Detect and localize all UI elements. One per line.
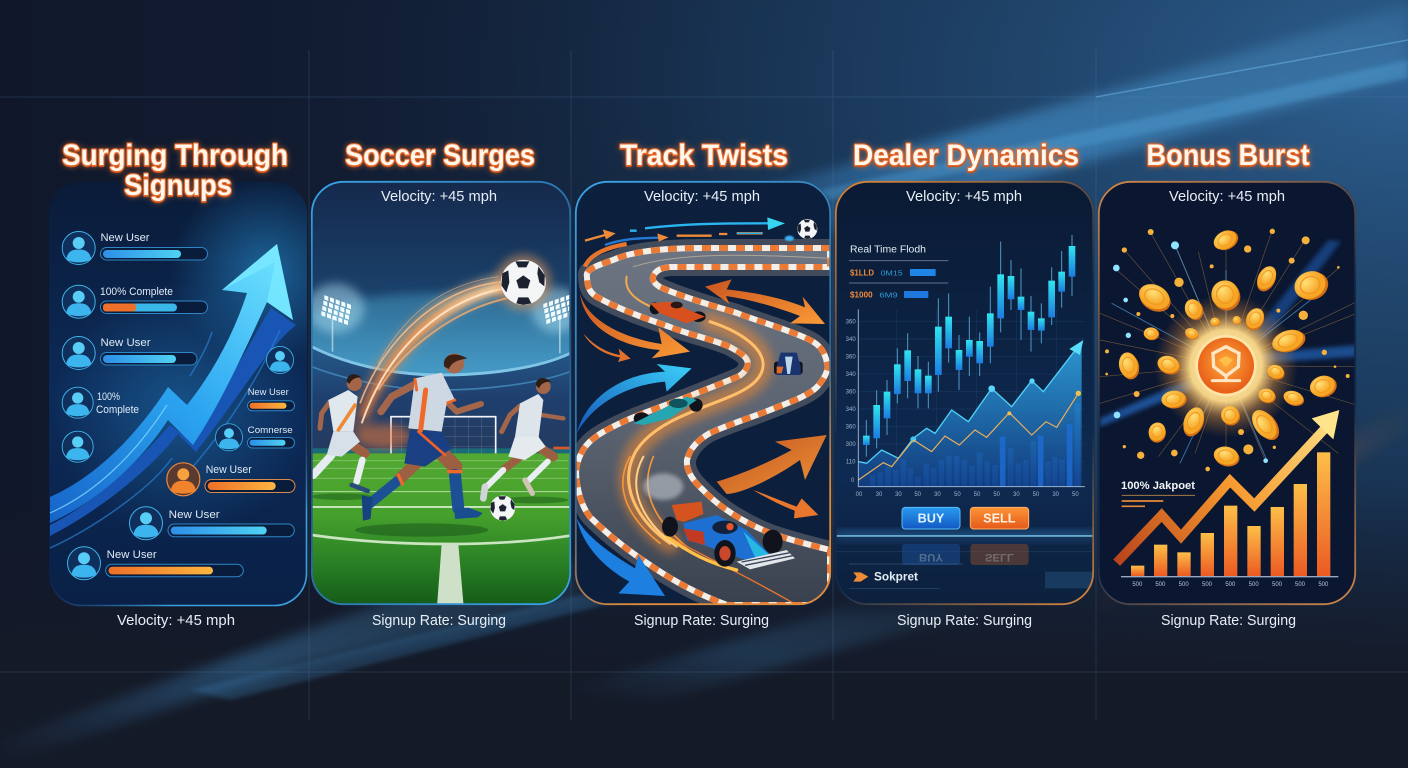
caption: signup rate 5: Signup Rate: Surging: [1161, 613, 1296, 629]
axes: 50: [1072, 492, 1079, 498]
info box: 6M9: [879, 290, 898, 299]
orange double arrow: [705, 279, 825, 324]
caption: velocity 4: Velocity: +45 mph: [906, 189, 1022, 205]
user row: right New User: New User: [248, 387, 289, 398]
user row: blue New User: [130, 507, 294, 540]
burst glow: [1154, 294, 1298, 437]
buy button: BUY: [918, 511, 945, 525]
orange low arrow: [753, 490, 818, 518]
orange right arrow: [717, 435, 827, 494]
user row: New User: [62, 232, 208, 264]
info box: [849, 245, 948, 299]
soccer ball large: [496, 255, 551, 310]
axes: 360: [846, 320, 856, 326]
reflected buttons: SELL: [985, 551, 1014, 563]
candlesticks: [863, 235, 1075, 457]
axes: 300: [846, 442, 856, 448]
user row: New User 2: [62, 336, 197, 370]
info box: $1000: [850, 289, 873, 299]
sell button: SELL: [983, 511, 1016, 525]
small orange arrow: [583, 333, 631, 362]
title: Track Twists: Track Twists: [620, 139, 788, 172]
user row: orange bar New User: New User: [107, 549, 157, 561]
chart grid: [858, 310, 1085, 462]
info box: Real Time Flodh: [850, 245, 926, 256]
reflected buttons: BUY: [919, 551, 943, 563]
soccer ball small: [490, 495, 515, 521]
floodlight right: [532, 287, 582, 353]
axes: 360: [846, 390, 856, 396]
ball trail: [355, 277, 507, 449]
axes: 50: [1033, 492, 1040, 498]
axes: 340: [846, 372, 856, 378]
axes: 110: [846, 460, 856, 466]
reflected buttons: [902, 544, 1029, 565]
axes: 360: [846, 355, 856, 361]
player left: [313, 374, 368, 491]
bars overlay: [1003, 424, 1070, 487]
panel: dealer: [835, 181, 1095, 607]
center emblem: [1195, 335, 1257, 396]
caption: velocity 5: Velocity: +45 mph: [1169, 189, 1285, 205]
bar chart: 500: [1179, 582, 1189, 588]
buy button: [902, 507, 960, 529]
pitch: [312, 453, 570, 607]
user row: orange New User: New User: [206, 464, 252, 476]
user row: orange bar New User: [68, 547, 243, 580]
jackpot label: 100% Jakpoet: [1121, 480, 1195, 492]
arrows flow: [585, 217, 785, 267]
caption: velocity 2: Velocity: +45 mph: [381, 189, 497, 205]
coins: [1117, 226, 1340, 468]
player right: [483, 378, 563, 498]
axes: 00: [856, 492, 863, 498]
user row: blue New User: New User: [169, 509, 220, 521]
blue low arrow: [577, 518, 665, 596]
surge arrow: [50, 244, 296, 548]
title: Soccer Surges: Soccer Surges: [345, 139, 535, 172]
sell button: [970, 507, 1029, 529]
small soccer ball: [785, 219, 817, 241]
sparks: [1105, 229, 1350, 471]
bar chart: 500: [1132, 582, 1143, 588]
player center: [362, 353, 482, 520]
car mid right: [774, 353, 803, 375]
user avatar: [62, 431, 93, 462]
jackpot label: [1121, 480, 1195, 506]
title: Surging Through Signups: Surging Through: [62, 139, 288, 172]
area chart: [858, 340, 1083, 487]
caption: signup rate 3: Signup Rate: Surging: [634, 613, 769, 629]
car mid: [633, 397, 703, 425]
title: Surging Through Signups: [62, 139, 288, 202]
panel: track: [575, 181, 831, 605]
panel: signups: [49, 182, 308, 606]
blue sparks: [1113, 241, 1268, 463]
car top: [650, 302, 706, 323]
title: Surging Through Signups: Signups: [124, 169, 232, 202]
sokpret row: Sokpret: [874, 570, 918, 584]
growth arrow: [1117, 410, 1339, 563]
volume bars: [873, 403, 1077, 487]
caption: velocity 1: Velocity: +45 mph: [117, 613, 235, 629]
bar chart: 500: [1225, 582, 1236, 588]
user row: New User: New User: [100, 232, 150, 244]
car large: [662, 502, 795, 569]
axes: 50: [974, 492, 981, 498]
axes: 360: [846, 424, 856, 430]
race track: [576, 248, 830, 605]
axes: 50: [993, 492, 1001, 498]
goal: [391, 417, 496, 457]
axes: 30: [934, 492, 941, 498]
axes: 50: [954, 492, 961, 498]
info box: $1LLD: [850, 267, 874, 277]
bar chart: [1121, 452, 1338, 588]
axes: [846, 309, 1085, 498]
user row: right New User: [248, 387, 294, 411]
caption: velocity 3: Velocity: +45 mph: [644, 189, 760, 205]
user row: New User 2: New User: [100, 337, 151, 349]
axes: 340: [846, 407, 856, 413]
glow divider: [835, 532, 1095, 607]
stadium stands: [312, 345, 570, 453]
bar chart: 500: [1202, 582, 1213, 588]
sokpret row: [849, 564, 963, 588]
user row: 100% Complete: 100% Complete: [100, 286, 173, 298]
user row: Comnerse: Comnerse: [248, 425, 293, 436]
bar chart: 500: [1318, 582, 1329, 588]
axes: 30: [1013, 492, 1020, 498]
info box: 0M15: [881, 268, 903, 277]
axes: 30: [876, 492, 883, 498]
user row: 100% Complete: [62, 285, 208, 318]
user row: 100% Complete 2: Complete: [96, 404, 139, 416]
orange curve arrow: [580, 293, 690, 358]
axes: 50: [914, 492, 922, 498]
panel: bonus: [1098, 181, 1357, 605]
user row: 100% Complete 2: [62, 387, 139, 418]
bar chart: 500: [1295, 582, 1306, 588]
axes: 340: [846, 337, 856, 343]
user row: orange New User: [167, 463, 295, 496]
user avatar small: [266, 346, 294, 374]
orange line: [858, 391, 1081, 480]
light trails: [623, 255, 830, 605]
user row: Comnerse: [215, 424, 294, 451]
bar chart: 500: [1272, 582, 1283, 588]
axes: 30: [895, 492, 902, 498]
title: Bonus Burst: Bonus Burst: [1146, 139, 1310, 172]
floodlight left: [307, 283, 364, 352]
caption: signup rate 4: Signup Rate: Surging: [897, 613, 1032, 629]
bar chart: 500: [1155, 582, 1166, 588]
burst rays: [1100, 232, 1357, 460]
panel: soccer: [310, 180, 572, 606]
caption: signup rate 2: Signup Rate: Surging: [372, 613, 506, 629]
blue curve arrow: [577, 364, 692, 433]
user row: 100% Complete 2: 100%: [97, 391, 120, 403]
bar chart: 500: [1249, 582, 1259, 588]
axes: 0: [851, 478, 855, 484]
title: Dealer Dynamics: Dealer Dynamics: [853, 139, 1079, 172]
blue streaks: [1100, 240, 1357, 427]
axes: 30: [1052, 492, 1060, 498]
